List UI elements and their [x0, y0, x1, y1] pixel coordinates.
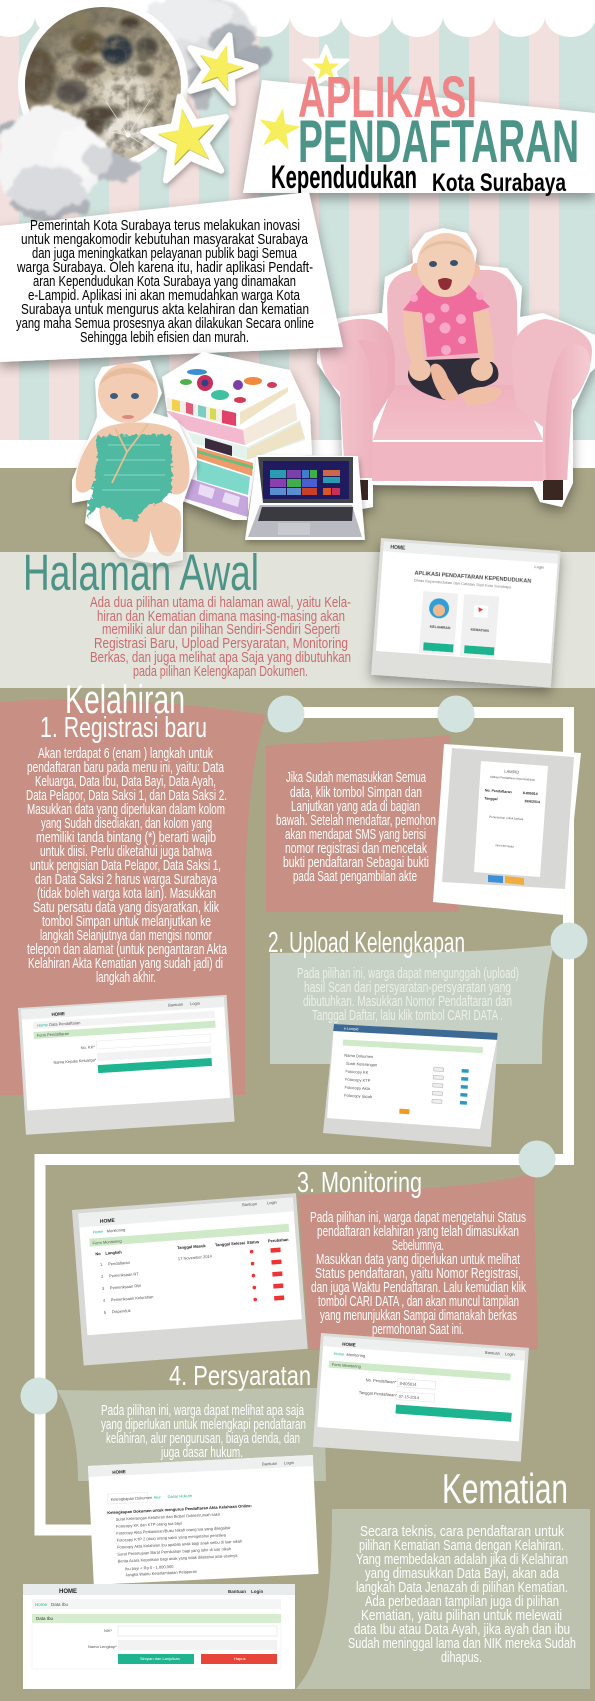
- screenshot: monitoring table: No: [95, 1251, 101, 1256]
- text block: halaman awal description: Ada dua pilihan utama di halaman awal, yaitu Kela-: [90, 594, 351, 611]
- screenshot: persyaratan document list: Kelengkapan Dokumen: [111, 1495, 152, 1502]
- screenshot: monitoring table: Pendaftaran: [108, 1260, 130, 1266]
- panel: introduction text: Surabaya untuk mengurus akta kelahiran dan kematian: [21, 302, 309, 318]
- text block: persyaratan: juga dasar hukum.: [160, 1444, 243, 1461]
- panel: introduction text: warga Surabaya. Oleh karena itu, hadir aplikasi Pendaft-: [16, 260, 313, 276]
- screenshot: monitoring table: Form Monitoring: [92, 1238, 122, 1246]
- heading: 3. Monitoring: 3. Monitoring: [297, 1167, 422, 1199]
- text block: lanjutan registrasi: data, klik tombol Simpan dan: [290, 784, 422, 801]
- screenshot: data ibu form: NIK*: [104, 1628, 113, 1633]
- screenshot: home page: KEMATIAN: [471, 628, 489, 633]
- title: Kependudukan: [271, 159, 417, 195]
- screenshot: persyaratan document list: HOME: [112, 1469, 126, 1475]
- screenshot: persyaratan document list: Dasar Hukum: [167, 1493, 193, 1499]
- text block: persyaratan: [101, 1402, 306, 1461]
- screenshot: monitoring table: Monitoring: [106, 1227, 125, 1233]
- front cloud: [0, 108, 138, 221]
- panel: introduction text: e-Lampid. Aplikasi ini akan memudahkan warga Kota: [28, 288, 301, 304]
- screenshot: monitoring form: Bantuan: [485, 1350, 500, 1356]
- screenshot: registrasi form: Home: [37, 1022, 49, 1028]
- text block: registrasi baru: (tidak boleh warga kota lain). Masukkan: [37, 885, 216, 902]
- text block: lanjutan registrasi: [276, 769, 436, 885]
- screenshot: persyaratan document list: Alur: [153, 1494, 162, 1500]
- screenshot: bukti pendaftaran: [433, 744, 581, 915]
- screenshot: monitoring table: Langkah: [105, 1249, 122, 1256]
- screenshot: data ibu form: Nama Lengkap*: [88, 1644, 117, 1649]
- text block: registrasi baru: untuk diisi. Perlu diketahui juga bahwa: [40, 843, 212, 860]
- text block: halaman awal description: [90, 594, 351, 680]
- panel: introduction text: Pemerintah Kota Surabaya terus melakukan inovasi: [30, 218, 300, 234]
- screenshot: home page: [371, 538, 561, 688]
- text block: halaman awal description: memiliki alur dan pilihan Sendiri-Sendiri Seperti: [102, 621, 340, 638]
- screenshot: persyaratan document list: Fotocopy Akta Perkawinan/Buku Nikah orang tua yang dilegalisir: [116, 1525, 231, 1536]
- screenshot: registrasi form: Bantuan: [168, 1002, 183, 1008]
- text block: lanjutan registrasi: pada Saat pengambilan akte: [293, 868, 417, 885]
- screenshot: data ibu form: Home: [35, 1602, 48, 1607]
- text block: halaman awal description: Berkas, dan juga melihat apa Saja yang dibutuhkan: [90, 649, 351, 666]
- screenshot: upload kelengkapan: Nama Dokumen: [344, 1053, 373, 1059]
- text block: lanjutan registrasi: akan mendapat SMS yang berisi: [285, 826, 426, 843]
- star: below moon: [138, 89, 235, 183]
- screenshot: monitoring form: 8-805014: [399, 1381, 417, 1387]
- screenshot: data ibu form: Login: [251, 1589, 263, 1594]
- text block: registrasi baru: untuk pengisian Data Pelapor, Data Saksi 1,: [30, 857, 221, 874]
- heading: Halaman Awal: Halaman Awal: [23, 544, 259, 601]
- text block: registrasi baru: dan Data Saksi 2 harus warga Surabaya: [35, 871, 217, 888]
- panel: introduction text: aran Kependudukan Kota Surabaya yang dinamakan: [33, 274, 296, 290]
- text block: monitoring: [310, 1209, 526, 1338]
- screenshot: persyaratan document list: Kelengkapan Dokumen untuk mengurus Pendaftaran Akta Kelahiran Online:: [107, 1503, 252, 1515]
- screenshot: monitoring form: Monitoring: [346, 1352, 365, 1358]
- screenshot: persyaratan document list: Fotocopy KTP 2 (dua) orang saksi yang mengetahui peristiwa: [117, 1532, 227, 1543]
- screenshot: data ibu form: HOME: [59, 1589, 77, 1595]
- screenshot: monitoring form: Login: [505, 1351, 515, 1357]
- screenshot: persyaratan document list: Berita Acara Kepolisian bagi anak yang tidak diketahui asal-usulnya: [118, 1553, 238, 1564]
- screenshot: persyaratan document list: Fotocopy Akta Kelahiran ibu apabila anak bagi anak seibu di luar nikah: [117, 1539, 242, 1550]
- screenshot: monitoring form: Home: [333, 1351, 345, 1357]
- screenshot: persyaratan document list: Ibu bayi < Rp 0 - 1.000.000: [125, 1564, 174, 1571]
- screenshot: monitoring form: [313, 1333, 529, 1462]
- text block: registrasi baru: [26, 745, 227, 986]
- screenshot: data ibu form: Data Ibu: [51, 1602, 69, 1607]
- text block: registrasi baru: Keluarga, Data Ibu, Data Bayi, Data Ayah,: [35, 773, 216, 790]
- text block: registrasi baru: telepon dan alamat (untuk pengantaran Akta: [27, 941, 227, 958]
- panel: upload kelengkapan: [270, 945, 554, 1064]
- panel: monitoring: [298, 1173, 538, 1350]
- text block: lanjutan registrasi: bawah. Setelah mendaftar, pemohon: [276, 812, 436, 829]
- screenshot: monitoring table: Dispenduk: [112, 1308, 131, 1314]
- screenshot: home page: Dinas Kependudukan dan Catatan Sipil Kota Surabaya: [414, 577, 512, 589]
- panel: kematian: [296, 1509, 590, 1689]
- screenshot: registrasi form: HOME: [51, 1011, 65, 1017]
- text block: lanjutan registrasi: bukti pendaftaran Sebagai bukti: [283, 854, 429, 871]
- panel: title background: [243, 80, 595, 193]
- screenshot: monitoring table: Pemeriksaan RW: [110, 1283, 141, 1290]
- screenshot: monitoring table: Perubahan: [268, 1237, 289, 1243]
- text block: registrasi baru: Masukkan data yang diperlukan dalam kolom: [27, 801, 225, 818]
- screenshot: bukti pendaftaran: Info lebih lanjut: [495, 843, 514, 849]
- illustration: baby on pink armchair: [317, 228, 595, 510]
- screenshot: persyaratan document list: Surat Keterangan Kelahiran dari Bidan/ Dokter/rumah sakit: [116, 1512, 221, 1522]
- text block: registrasi baru: langkah akhir.: [96, 969, 156, 986]
- text block: registrasi baru: Akan terdapat 6 (enam ) langkah untuk: [38, 745, 213, 762]
- connector nodes: [20, 696, 588, 1414]
- screenshot: home page: Login: [534, 564, 544, 570]
- screenshot: monitoring table: 5: [104, 1310, 107, 1315]
- heading: 2. Upload Kelengkapan: 2. Upload Kelengkapan: [268, 927, 465, 959]
- screenshot: persyaratan document list: [88, 1455, 319, 1585]
- screenshot: monitoring form: HOME: [342, 1342, 356, 1348]
- screenshot: persyaratan document list: Fotocopy KK dan KTP orang tua bayi: [116, 1520, 182, 1529]
- screenshot: upload kelengkapan: e-Lampid: [344, 1027, 359, 1031]
- text block: kematian: [348, 1523, 576, 1666]
- panel: persyaratan: [57, 1388, 326, 1481]
- text block: kematian: dihapus.: [441, 1649, 482, 1666]
- screenshot: bukti pendaftaran: No. Pendaftaran: [485, 788, 512, 794]
- text block: registrasi baru: Satu persatu data yang disyaratkan, klik: [33, 899, 219, 916]
- screenshot: data ibu form: Hapus: [234, 1656, 246, 1661]
- title: APLIKASI: [298, 65, 477, 130]
- illustration: stack of books: [162, 352, 312, 520]
- text block: halaman awal description: Registrasi Baru, Upload Persyaratan, Monitoring: [94, 635, 348, 652]
- screenshot: upload kelengkapan: Fotocopy KTP: [345, 1077, 371, 1083]
- screenshot: bukti pendaftaran: 8-805014: [523, 791, 538, 796]
- heading: 1. Registrasi baru: 1. Registrasi baru: [40, 712, 207, 744]
- screenshot: monitoring table: Login: [267, 1200, 277, 1205]
- text block: lanjutan registrasi: Jika Sudah memasukkan Semua: [286, 769, 426, 786]
- screenshot: bukti pendaftaran: Aplikasi Pendaftaran Kependudukan: [490, 775, 536, 782]
- screenshot: upload kelengkapan: Fotocopy Ijazah: [344, 1093, 373, 1099]
- screenshot: monitoring table: Pemeriksaan Kelurahan: [111, 1294, 154, 1302]
- screenshot: data ibu form: [23, 1584, 295, 1689]
- panel: introduction text: dan juga meningkatkan pelayanan publik bagi Semua: [32, 246, 298, 262]
- screenshot: monitoring table: Pemeriksaan RT: [109, 1271, 139, 1278]
- screenshot: registrasi form: Nama Kepala Keluarga*: [53, 1057, 97, 1065]
- text block: monitoring: permohonan Saat ini.: [372, 1321, 464, 1338]
- text block: registrasi baru: pendaftaran baru pada menu ini, yaitu: Data: [27, 759, 224, 776]
- screenshot: upload kelengkapan: Fotocopy KK: [345, 1069, 369, 1075]
- screenshot: home page: APLIKASI PENDAFTARAN KEPENDUDUKAN: [414, 570, 531, 585]
- scalloped awning: [0, 0, 595, 37]
- screenshot: monitoring table: 4: [103, 1298, 106, 1303]
- screenshot: monitoring table: 1: [100, 1262, 103, 1267]
- moon: [18, 0, 188, 170]
- screenshot: bukti pendaftaran: 15/6/2014: [524, 799, 540, 804]
- screenshot: persyaratan document list: Surat Persetujuan Barat Pernikahan bagi yang lahir di luar nikah: [117, 1546, 231, 1557]
- text block: registrasi baru: yang Sudah disediakan, dan kolom yang: [41, 815, 212, 832]
- text block: monitoring: Sebelumnya.: [392, 1237, 444, 1254]
- heading: Kelahiran: Kelahiran: [65, 678, 185, 722]
- screenshot: monitoring form: Form Monitoring: [332, 1362, 361, 1369]
- text block: registrasi baru: Data Pelapor, Data Saksi 1, dan Data Saksi 2.: [26, 787, 227, 804]
- screenshot: bukti pendaftaran: Tanggal: [484, 796, 498, 801]
- star: left of title: [255, 105, 304, 151]
- screenshot: data ibu form: Bantuan: [228, 1589, 246, 1594]
- screenshot: monitoring form: 07-15-2014: [399, 1394, 420, 1400]
- screenshot: registrasi form: Data Pendaftaran: [49, 1020, 81, 1027]
- text block: registrasi baru: langkah Selanjutnya dan mengisi nomor: [40, 927, 212, 944]
- screenshot: registrasi form: No. KK*: [80, 1044, 95, 1050]
- text block: halaman awal description: pada pilihan Kelengkapan Dokumen.: [133, 663, 308, 680]
- screenshot: registrasi form: [18, 995, 235, 1135]
- screenshot: upload kelengkapan: [323, 1024, 498, 1147]
- illustration: baby in teal romper: [72, 360, 197, 565]
- screenshot: monitoring table: 3: [102, 1286, 105, 1291]
- text block: registrasi baru: memiliki tanda bintang (*) berarti wajib: [36, 829, 216, 846]
- text block: persyaratan: yang diperlukan untuk melengkapi pendaftaran: [101, 1416, 306, 1433]
- text block: persyaratan: kelahiran, alur pengurusan, biaya denda, dan: [106, 1430, 300, 1447]
- screenshot: monitoring table: Tanggal Masuk: [177, 1243, 207, 1250]
- panel: introduction text: Sehingga lebih efisien dan murah.: [80, 330, 249, 346]
- screenshot: upload kelengkapan: Surat Keterangan: [346, 1061, 377, 1067]
- star: small above title: [304, 46, 348, 87]
- star: right of moon: [179, 26, 262, 106]
- text block: persyaratan: Pada pilihan ini, warga dapat melihat apa saja: [101, 1402, 304, 1419]
- screenshot: home page: KELAHIRAN: [430, 625, 451, 630]
- text block: halaman awal description: hiran dan Kematian dimana masing-masing akan: [97, 608, 345, 625]
- text block: registrasi baru: tombol Simpan untuk melanjutkan ke: [42, 913, 211, 930]
- text block: registrasi baru: Kelahiran Akta Kematian yang sudah jadi) di: [28, 955, 223, 972]
- text block: upload kelengkapan: [297, 965, 519, 1024]
- panel: introduction text: yang maha Semua prosesnya akan dilakukan Secara online: [16, 316, 314, 332]
- screenshot: data ibu form: Data Ibu: [36, 1616, 54, 1621]
- illustration: laptop: [245, 455, 365, 540]
- panel: registrasi baru: [0, 699, 266, 1095]
- screenshot: monitoring table: Tanggal Selesai: [215, 1240, 245, 1247]
- screenshot: monitoring table: Bantuan: [242, 1201, 257, 1207]
- screenshot: registrasi form: Form Pendaftaran: [37, 1031, 69, 1038]
- screenshot: data ibu form: Simpan dan Lanjutkan: [140, 1656, 180, 1661]
- screenshot: registrasi form: Login: [190, 1001, 200, 1006]
- screenshot: monitoring table: Home: [93, 1229, 104, 1235]
- screenshot: persyaratan document list: Bantuan: [262, 1461, 277, 1466]
- screenshot: monitoring form: No. Pendaftaran*: [366, 1377, 397, 1385]
- screenshot: bukti pendaftaran: Persyaratan untuk berkas: [489, 815, 524, 821]
- screenshot: persyaratan document list: Jangka Waktu Keterlambatan Pelaporan: [125, 1569, 197, 1577]
- text block: lanjutan registrasi: nomor registrasi dan mencetak: [285, 840, 427, 857]
- screenshot: monitoring table: 17 November 2014: [178, 1254, 213, 1261]
- panel: introduction text: [0, 192, 343, 362]
- title: [271, 65, 579, 197]
- panel: introduction text: untuk mengakomodir kebutuhan masyarakat Surabaya: [21, 232, 309, 248]
- heading: 4. Persyaratan: 4. Persyaratan: [169, 1360, 311, 1391]
- screenshot: upload kelengkapan: Fotocopy Akta: [344, 1085, 371, 1091]
- screenshot: bukti pendaftaran: LAMPID: [504, 769, 519, 775]
- back cloud: [133, 0, 275, 109]
- screenshot: home page: HOME: [390, 545, 406, 552]
- screenshot: monitoring form: Tanggal Pendaftaran*: [359, 1390, 398, 1398]
- text block: lanjutan registrasi: Lanjutkan yang ada di bagian: [291, 798, 420, 815]
- screenshot: monitoring table: Status: [247, 1239, 260, 1245]
- screenshot: persyaratan document list: Login: [284, 1460, 294, 1465]
- panel: lanjutan registrasi: [266, 735, 459, 912]
- screenshot: monitoring table: 2: [101, 1274, 104, 1279]
- screenshot: monitoring table: [72, 1193, 308, 1366]
- connector line: [40, 712, 568, 1530]
- screenshot: monitoring table: HOME: [100, 1218, 116, 1225]
